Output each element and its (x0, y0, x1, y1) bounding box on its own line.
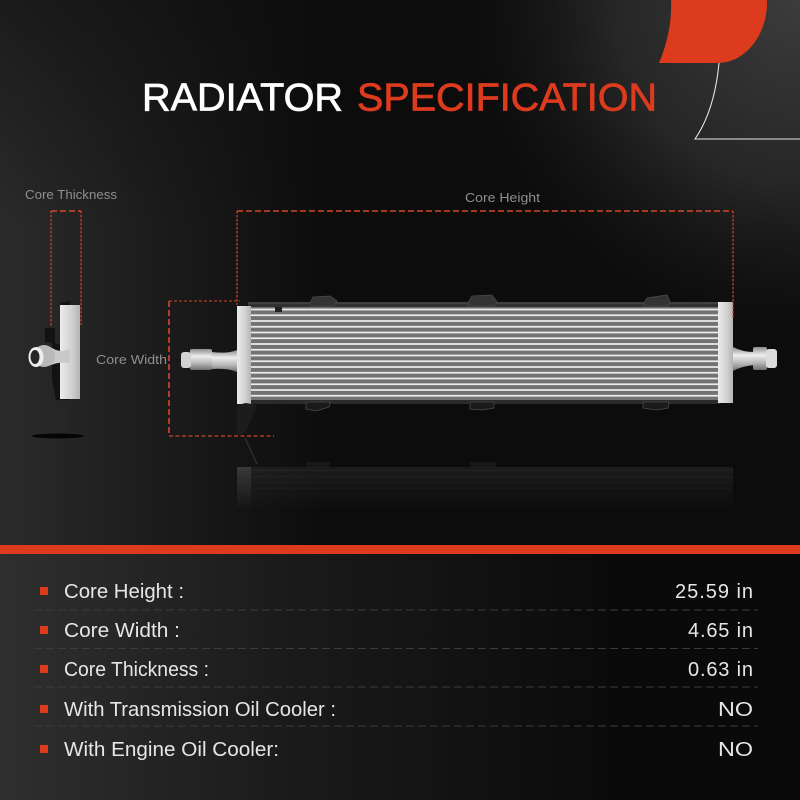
fin retainer (275, 307, 282, 312)
specification list (34, 581, 758, 761)
side bracket (45, 301, 70, 400)
row: transmission oil cooler (40, 699, 753, 721)
accent band (0, 545, 800, 554)
right pipe (733, 347, 777, 371)
corner decoration (659, 0, 800, 139)
bottom clips (306, 402, 669, 411)
side tank (60, 305, 80, 399)
reflection of radiator (237, 438, 733, 500)
right tank (718, 302, 733, 403)
lower bracket (237, 403, 257, 436)
row: core thickness (40, 659, 753, 681)
dimension: core thickness: Core Thickness (25, 187, 118, 202)
top clips (310, 295, 670, 306)
top rail (248, 302, 720, 307)
main radiator (181, 295, 777, 436)
title: RADIATOR (142, 76, 343, 120)
row: core height (40, 581, 753, 603)
dimension: core height: Core Height (465, 190, 540, 205)
side outlet (28, 345, 70, 367)
row: engine oil cooler: NO (718, 739, 753, 761)
row: core height: 25.59 in (675, 581, 753, 603)
side bracket foot (47, 403, 70, 436)
dimension: core width: Core Width (96, 352, 167, 367)
row: engine oil cooler: With Engine Oil Cooler: (64, 739, 279, 761)
bottom rail (248, 400, 720, 404)
left tank (237, 306, 251, 404)
title: SPECIFICATION (357, 76, 657, 120)
row: core width: Core Width : (64, 620, 180, 642)
side view radiator (28, 301, 84, 438)
dimension: core height (237, 190, 733, 318)
row: core width: 4.65 in (688, 620, 753, 642)
row: core width (40, 620, 753, 642)
row: transmission oil cooler: With Transmission Oil Cooler : (64, 699, 336, 721)
core fins (250, 307, 718, 400)
left pipe (181, 349, 237, 372)
title (142, 76, 657, 120)
row: core thickness: Core Thickness : (64, 659, 209, 681)
dimension: core thickness (25, 187, 118, 326)
row: core thickness: 0.63 in (688, 659, 753, 681)
row: engine oil cooler (40, 739, 753, 761)
row: core height: Core Height : (64, 581, 184, 603)
row: transmission oil cooler: NO (718, 699, 753, 721)
